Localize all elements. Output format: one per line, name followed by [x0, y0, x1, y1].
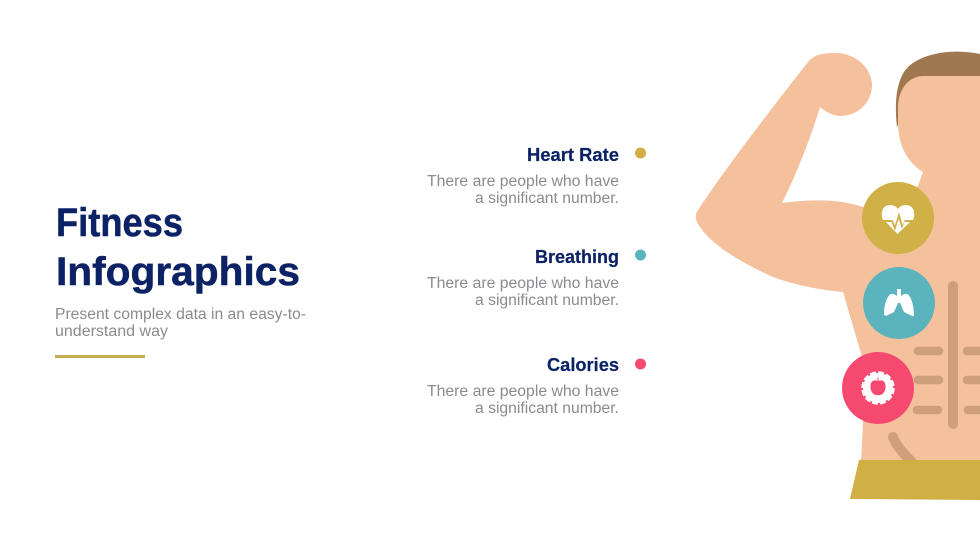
item: calories: There are people who have: [427, 383, 619, 400]
hair: [896, 52, 980, 127]
item: calories: a significant number.: [475, 400, 619, 417]
accent rule: [55, 355, 145, 358]
icon: calories badge: [842, 352, 914, 424]
item: heart rate: [427, 144, 646, 207]
subtitle: understand way: [55, 323, 168, 340]
item: heart rate: Heart Rate: [527, 144, 619, 165]
item: calories: [427, 354, 646, 417]
item: breathing: a significant number.: [475, 292, 619, 309]
item: breathing: Breathing: [535, 246, 619, 267]
subtitle: Present complex data in an easy-to-: [55, 306, 306, 323]
icon: lungs badge: [863, 267, 935, 339]
shorts waistband: [850, 460, 980, 500]
body and arm: [696, 53, 980, 462]
item: breathing: [427, 246, 646, 309]
figure: flexing torso: [696, 52, 980, 500]
title: [56, 201, 300, 294]
icon: heart rate badge: [862, 182, 934, 254]
subtitle: [55, 306, 306, 340]
item: heart rate: a significant number.: [475, 190, 619, 207]
item: calories: Calories: [547, 354, 619, 375]
item: breathing: There are people who have: [427, 275, 619, 292]
title: Infographics: [56, 250, 300, 294]
title: Fitness: [56, 201, 183, 245]
abdominal lines: [893, 286, 980, 462]
item: heart rate: There are people who have: [427, 173, 619, 190]
